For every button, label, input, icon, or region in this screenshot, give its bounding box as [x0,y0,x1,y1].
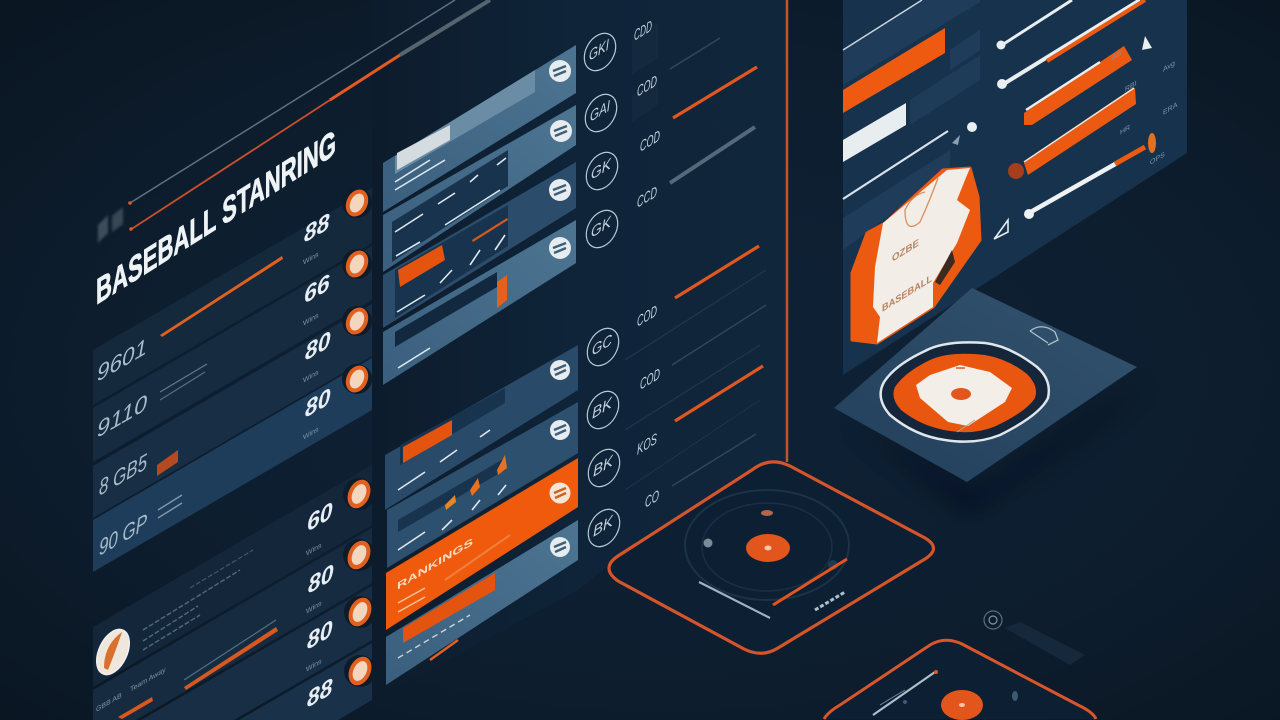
chart: bat bars [996,0,1178,219]
row 4: Wins [303,424,319,442]
icon: helmet [1030,327,1058,345]
panel: outlined stat badges: GC [592,331,612,360]
panel: small stat codes: CO [645,487,659,512]
panel: baseball diamond plate [834,288,1137,482]
card 3 [383,162,576,328]
jersey illustration: OZBE [892,237,919,265]
card 1 [383,45,576,212]
row 7: Wins [306,656,322,674]
field ring [881,342,1049,442]
card 6 [387,402,578,568]
panel: outlined stat badges: GK [591,155,612,184]
chart: stat bars [625,38,766,490]
row 1: 9601 [97,334,147,388]
row 2: Wins [303,310,319,328]
row 6: 80 [308,560,334,600]
row 4: 90 GP [99,509,147,562]
jersey illustration [852,168,980,343]
diamond diagram 1 [609,462,934,653]
row 5: Wins [306,540,322,558]
panel: small stat codes: COD [640,365,660,394]
row 2: 66 [304,270,330,310]
panel: outlined stat badges: GK [591,213,612,242]
bat labels: AB [1112,48,1121,62]
card 7 highlighted [386,458,578,630]
bat labels: ERA [1163,99,1178,117]
panel: team cards upper [383,45,576,385]
panel: outlined stat badges [578,28,626,552]
row 4 [93,358,372,572]
panel: small stat codes: CDD [634,17,652,45]
card 7 highlighted: RANKINGS [397,536,473,593]
panel: outlined stat badges: GAI [590,97,610,126]
bat 1 [996,0,1072,50]
panel: small stat codes [632,17,660,512]
pitcher mound [951,388,971,400]
bat 2 [997,0,1145,89]
panel: outlined stat badges: BK [593,511,614,541]
title: BASEBALL STANRING [96,122,336,313]
panel: small stat codes: COD [637,72,657,101]
row 1: Wins [303,249,319,267]
row 3: Wins [303,367,319,385]
card 4 [383,220,576,385]
row 5 [90,465,375,687]
bat labels: OPS [1150,150,1165,167]
panel: small stat codes: CCD [637,183,657,212]
bat labels: Avg [1163,58,1175,74]
bat 3 [1024,36,1152,125]
bat 4 [1008,88,1136,179]
panel: right stats board [843,0,1187,375]
orange bar [843,28,945,113]
card 8 [386,520,578,685]
diamond diagram 2 [824,640,1096,720]
panel: team cards lower [385,345,578,685]
row 6 [93,528,375,720]
row 5: 60 [307,498,333,538]
row 7: 80 [307,616,333,656]
row 1: 88 [304,209,330,249]
panel: standings board backdrop [372,0,787,700]
panel: outlined stat badges: GKI [589,36,609,65]
panel: small stat codes: KOS [637,430,657,459]
row 1 [93,186,372,405]
row 2: 9110 [97,389,148,444]
row 7 [141,586,376,720]
shadow under base panel [850,380,1150,510]
panel: standings rows upper left [93,186,372,572]
card 2 [383,105,576,272]
white lines [843,0,948,199]
connector line [786,0,788,462]
row 3: 8 GB5 [99,448,148,502]
row 3 [93,304,372,518]
jersey illustration: BASEBALL [882,273,932,315]
bat labels: RBI [1125,79,1137,94]
field orange [893,354,1036,432]
panel: outlined stat badges: BK [592,393,613,423]
row 6: Team Away [130,665,166,694]
card 5 [385,345,578,510]
row 8: 88 [307,674,333,714]
icon: title badge [98,207,123,243]
panel: outlined stat badges: BK [593,451,614,481]
row 8 [239,643,376,720]
bat labels [1112,48,1178,167]
accent lines at top of board [128,0,490,231]
row 6: GBB AB [96,691,122,714]
panel: standings rows lower left [90,465,376,720]
row 3: 80 [305,327,331,367]
field white [916,365,1012,426]
row 2 [93,246,372,462]
white bar [843,103,906,162]
icon and note above diagram 2 [984,611,1085,665]
bat labels: HR [1120,122,1131,137]
panel: small stat codes: COD [637,302,657,331]
icons [952,122,1008,239]
panel: small stat codes: COD [640,127,660,156]
row 6: Wins [306,598,322,616]
row 4: 80 [305,384,331,424]
bat 5 [1024,133,1156,219]
